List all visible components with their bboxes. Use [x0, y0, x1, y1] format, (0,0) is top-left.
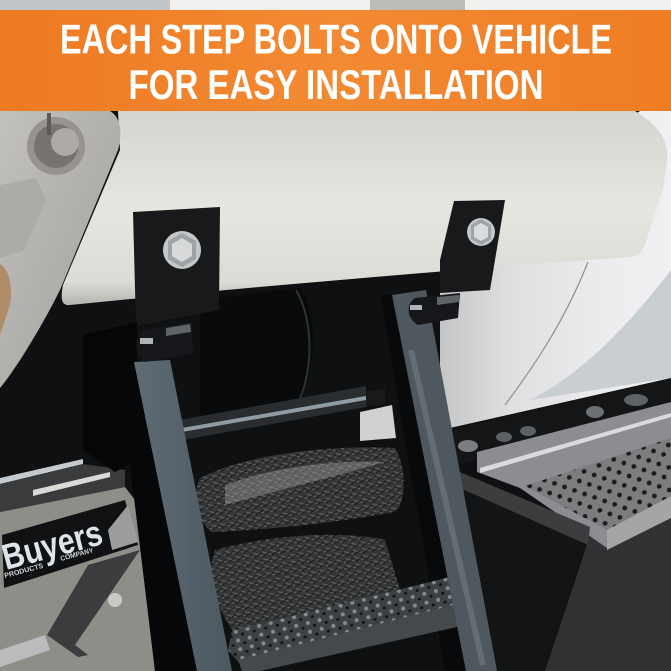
cylinder behind ladder: [200, 288, 313, 420]
cross bar: [180, 386, 366, 440]
icon: hex bolt right: [467, 218, 495, 246]
orange banner: [0, 10, 671, 111]
left hinge: [136, 322, 193, 362]
left aluminium bracket: [0, 111, 120, 388]
frame rail with bolts, right: [450, 378, 671, 466]
logo text: Buyers: [0, 512, 107, 578]
icon: bracket bolt: [27, 113, 85, 175]
right rail: [392, 290, 497, 671]
left frame rails: [0, 459, 125, 512]
perforated step deck: [460, 402, 671, 550]
left hanging bracket: [133, 207, 220, 326]
icon: hex bolt: [163, 231, 201, 269]
right black mudflap: [462, 480, 590, 671]
logo text: COMPANY: [60, 547, 95, 563]
left rail: [134, 360, 232, 671]
banner heading: FOR EASY INSTALLATION: [128, 61, 544, 108]
white tank: [62, 111, 667, 305]
tread plate: [228, 576, 461, 664]
right rail shadow side: [380, 295, 465, 671]
wrapped exhaust pipes: [196, 447, 404, 640]
right hinge: [409, 293, 460, 325]
strut shadow and bolt on pavement: [0, 550, 140, 667]
white tube behind ladder: [360, 405, 396, 441]
pavement lower left: [0, 487, 155, 671]
mudflap logo plate: [0, 500, 138, 588]
right hanging bracket: [440, 200, 505, 293]
top strip above banner: [0, 0, 671, 11]
shadow strut left: [83, 322, 137, 472]
logo text: PRODUCTS: [4, 563, 44, 580]
ladder step: [83, 200, 505, 671]
banner heading: [60, 16, 612, 108]
mudflap panel: [545, 495, 671, 671]
left rail shadow side: [127, 362, 197, 671]
white fender right: [440, 111, 671, 428]
